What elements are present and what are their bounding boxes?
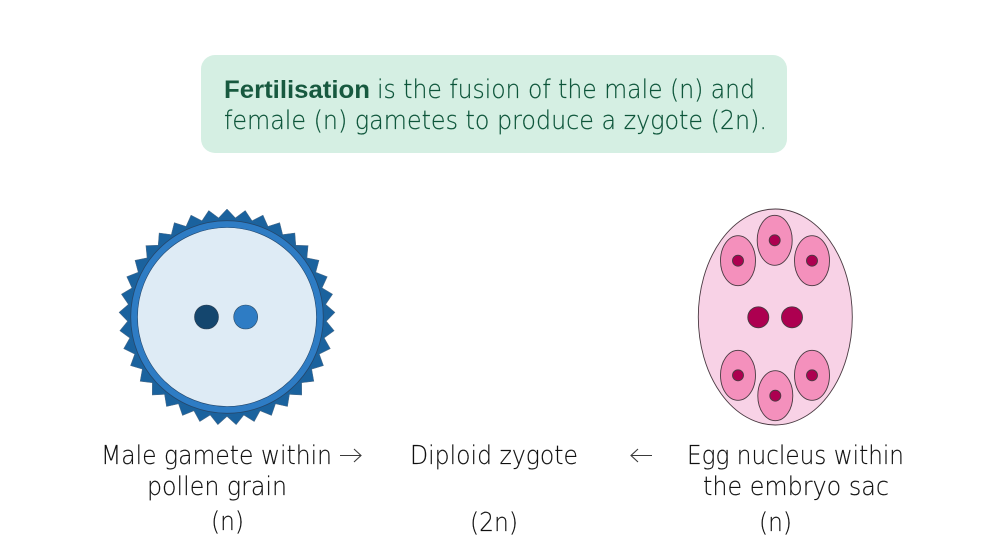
definition text: Fertilisation — [224, 76, 370, 104]
label: diploid zygote: (2n) — [470, 508, 518, 538]
label: male gamete: pollen grain — [147, 472, 287, 502]
icon: pollen grain with male gametes — [119, 209, 335, 425]
male gamete nucleus, light — [234, 305, 258, 329]
central nuclei — [748, 307, 802, 328]
label: male gamete — [101, 441, 332, 537]
arrow: egg to zygote — [631, 449, 652, 462]
label: egg nucleus: (n) — [759, 508, 792, 538]
label: egg nucleus — [687, 441, 904, 538]
male gamete nucleus, dark — [194, 305, 218, 329]
label: diploid zygote: Diploid zygote — [410, 441, 578, 471]
label: egg nucleus: Egg nucleus within — [687, 441, 904, 471]
label: male gamete: (n) — [211, 507, 244, 537]
label: egg nucleus: the embryo sac — [703, 472, 889, 502]
arrow: male to zygote — [340, 449, 361, 462]
icon: embryo sac with egg nucleus — [698, 209, 852, 425]
definition panel — [201, 55, 787, 153]
definition text — [224, 75, 767, 136]
label: male gamete: Male gamete within — [101, 441, 332, 471]
definition text: is the fusion of the male (n) and — [377, 75, 755, 105]
label: diploid zygote — [410, 441, 578, 538]
definition text: female (n) gametes to produce a zygote (2n). — [224, 106, 767, 136]
cells around the sac — [720, 215, 830, 421]
